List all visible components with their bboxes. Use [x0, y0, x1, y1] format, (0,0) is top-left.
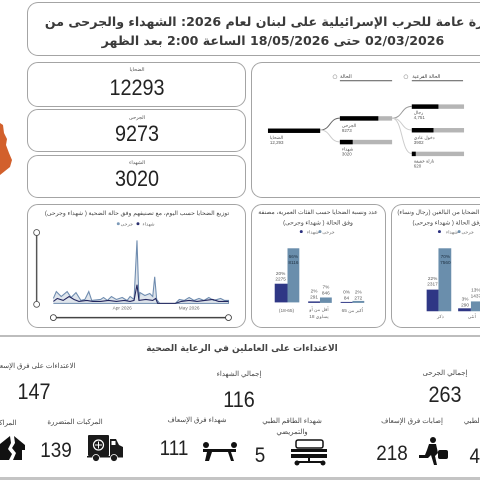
bar axis labels: أنثى — [468, 312, 477, 320]
stat: ambulance wounded: 218 — [376, 442, 408, 465]
bar values — [427, 254, 480, 308]
bar axis labels — [436, 312, 477, 320]
card: total casualties — [27, 62, 246, 107]
card: wounded: الجرحى — [129, 115, 145, 121]
bar values: 2% — [311, 289, 318, 295]
stat: ambulance martyrs: شهداء فرق الإسعاف — [167, 417, 227, 424]
bar values: 7560 — [440, 260, 451, 266]
chart legend: شهداء — [446, 230, 458, 236]
tree filter headers: الحالة — [340, 74, 352, 80]
card: total casualties: 12293 — [109, 75, 165, 100]
card: wounded: 9273 — [115, 121, 159, 146]
section divider bands — [0, 335, 480, 337]
stat: ambulance wounded — [376, 418, 448, 465]
chart title — [397, 209, 480, 227]
title panel — [27, 2, 480, 56]
bar axis labels: أقل من أو — [308, 305, 329, 313]
card: total casualties: الضحايا — [130, 67, 144, 73]
stat: total wounded — [422, 370, 467, 407]
bar values: 291 — [310, 294, 318, 300]
tree labels: نازلة خفيفة — [414, 159, 434, 164]
stat: total wounded: إجمالي الجرحى — [423, 370, 467, 377]
bar axis labels — [279, 305, 364, 320]
card: martyrs — [27, 155, 246, 198]
stat: medical staff martyrs: والتمريضي — [276, 429, 308, 436]
stat: ambulance wounded: إصابات فرق الإسعاف — [381, 418, 443, 425]
x axis labels: Apr 2026 — [113, 305, 132, 311]
tree labels: دخول عادي — [414, 135, 435, 140]
card: wounded — [27, 109, 246, 152]
tree labels: 4,751 — [414, 115, 425, 120]
bar values: 20% — [276, 271, 286, 277]
title text: 02/03/2026 حتى 18/05/2026 الساعة 2:00 بعد الظهر — [102, 33, 444, 48]
tree labels: الضحايا — [270, 135, 283, 140]
bar values: 2317 — [427, 282, 438, 288]
bar values: 8116 — [288, 260, 299, 266]
bars: under 18 — [308, 297, 332, 303]
section heading: الاعتداءات على العاملين في الرعاية الصحية — [146, 344, 338, 354]
bar values: 70% — [441, 254, 451, 260]
chart legend: جرحى — [121, 223, 133, 228]
tree bars — [268, 104, 464, 156]
bar axis labels: (18-65) — [279, 308, 295, 314]
stat: damaged vehicles: المركبات المتضررة — [47, 419, 103, 426]
stat: ambulance martyrs: 111 — [160, 437, 188, 460]
tree labels: 9273 — [342, 128, 352, 133]
chart legend — [117, 222, 155, 228]
tree filter headers: الحالة الفرعية — [412, 74, 440, 80]
panel: decomposition tree — [251, 62, 480, 198]
icon: stretcher — [203, 442, 237, 461]
icon: damaged house — [0, 436, 25, 460]
bar values: 272 — [354, 295, 363, 301]
tree links — [320, 106, 412, 154]
bar axis labels: يساوي 18 — [309, 314, 329, 320]
x axis labels: May 2026 — [179, 305, 200, 311]
icon: running paramedic — [419, 437, 448, 465]
tree labels: 3902 — [414, 140, 424, 145]
bar values: 7% — [322, 285, 330, 291]
chart legend: شهداء — [143, 222, 155, 228]
stat: ambulance martyrs — [160, 416, 237, 461]
chart legend: جرحى — [462, 231, 474, 236]
stat: medical staff martyrs: 5 — [255, 444, 265, 467]
icon: ambulance — [87, 435, 123, 462]
stat: total martyrs: 116 — [223, 387, 255, 412]
stat: total martyrs — [217, 370, 261, 412]
stat: attacks on ambulance teams — [0, 362, 76, 404]
chart title — [258, 209, 378, 227]
bar values — [275, 254, 363, 301]
chart legend — [300, 230, 335, 236]
chart legend: شهداء — [307, 230, 319, 236]
title text — [45, 14, 480, 48]
x axis labels — [113, 305, 200, 311]
bar values: 2275 — [275, 277, 286, 283]
icon: hospital bed — [291, 439, 327, 466]
stat: medical staff martyrs — [255, 418, 327, 467]
tree filter headers — [333, 74, 463, 81]
section: attacks on healthcare workers — [0, 344, 480, 468]
card: martyrs: الشهداء — [129, 160, 145, 166]
line series: wounded — [53, 240, 228, 303]
panel: adults by gender bar chart — [391, 204, 480, 328]
chart title: وفق الحالة ( شهداء وجرحى) — [283, 220, 353, 227]
bars: men — [427, 248, 451, 311]
tree labels: 620 — [414, 163, 422, 168]
panel: daily casualties line chart — [27, 204, 246, 328]
tree labels: شهداء — [342, 147, 354, 152]
chart title: توزيع الضحايا حسب اليوم، مع تصنيفهم وفق حالة الضحية ( شهداء وجرحى) — [45, 210, 229, 217]
bar values: 0% — [343, 290, 351, 296]
bar values: 2% — [355, 290, 363, 296]
panel: age groups bar chart — [251, 204, 386, 328]
tree labels: 12,293 — [270, 140, 284, 145]
bar axis labels: أكبر من 65 — [342, 306, 364, 314]
chart legend: جرحى — [322, 231, 335, 236]
card: martyrs: 3020 — [115, 166, 159, 191]
line series: martyrs — [53, 285, 228, 303]
chart legend — [438, 230, 474, 236]
chart title: عدد ونسبة الضحايا حسب الفئات العمرية، مصنفة — [258, 209, 378, 216]
stat: attacks on ambulance teams: 147 — [17, 379, 51, 404]
bar values: 290 — [461, 302, 469, 308]
vertical slider — [34, 230, 40, 307]
bar axis labels: ذكر — [436, 314, 444, 320]
stat: total martyrs: إجمالي الشهداء — [217, 371, 261, 378]
bar values: 66% — [289, 254, 299, 260]
bars: over 65 — [341, 301, 364, 303]
bars: 18-64 — [275, 248, 299, 302]
tree labels — [270, 110, 435, 168]
stat: damaged vehicles: 139 — [40, 439, 72, 462]
stat: medical staff martyrs: شهداء الطاقم الطبي — [262, 418, 322, 425]
stat: total wounded: 263 — [428, 382, 462, 407]
tree labels: رجال — [414, 110, 423, 115]
tree labels: الجرحى — [342, 123, 356, 128]
bar values: 84 — [344, 295, 350, 301]
bar values: 3% — [462, 296, 469, 302]
icon: map of Lebanon fragment — [0, 123, 12, 175]
tree labels: 3020 — [342, 152, 352, 157]
stat: damaged vehicles — [40, 418, 123, 462]
bar values: 846 — [322, 291, 330, 297]
horizontal slider — [50, 315, 231, 321]
bars: women — [458, 301, 480, 311]
stat: medical staff wounded — [464, 418, 480, 468]
bar values: 22% — [428, 276, 438, 282]
